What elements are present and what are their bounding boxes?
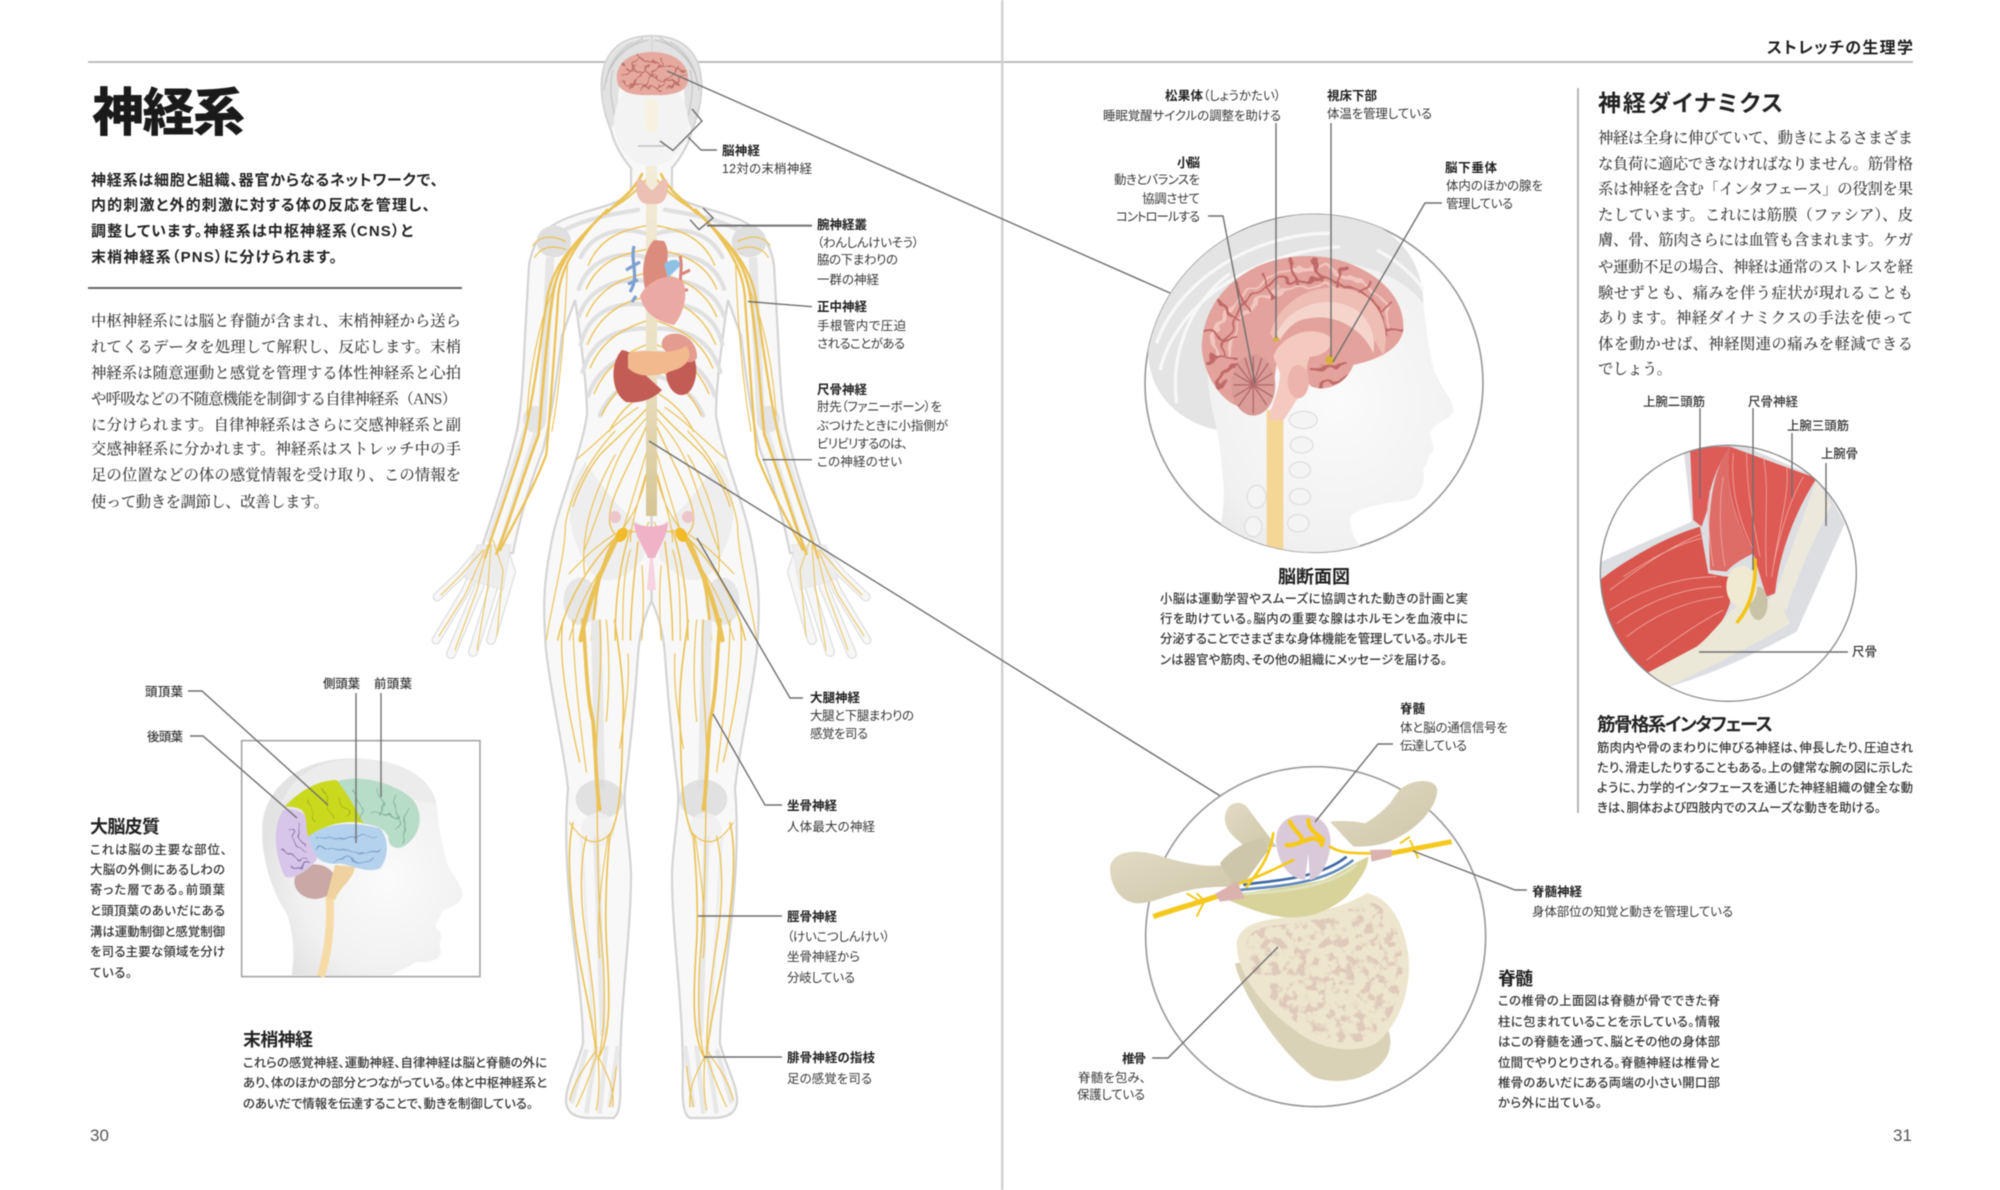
text: spinal cord: はこの脊髄を通って、脳とその他の身体部 — [1498, 1034, 1720, 1049]
text: cerebral cortex: を司る主要な領域を分け — [90, 944, 225, 959]
text: spinal cord: 椎骨のあいだにある両端の小さい開口部 — [1498, 1075, 1720, 1090]
cerebellum — [294, 864, 336, 899]
link line: spine to vertebra — [649, 441, 1230, 802]
label: hypothalamus: 体温を管理している — [1327, 106, 1432, 121]
label: pituitary: 体内のほかの腺を — [1446, 179, 1543, 193]
label: brachial plexus: 腕神経叢 — [817, 217, 867, 232]
spinal cord — [646, 166, 657, 516]
ulnar nerve — [1738, 560, 1755, 622]
text: neurodynamics — [1597, 90, 1914, 378]
text: spinal cord: から外に出ている。 — [1498, 1095, 1602, 1110]
label: brachial plexus: 一群の神経 — [817, 272, 879, 287]
label: pituitary: 脳下垂体 — [1445, 160, 1497, 175]
label: pineal body: 松果体 — [1165, 88, 1203, 103]
label: brachial plexus — [817, 217, 919, 287]
skeleton and nerves, leg — [675, 620, 741, 1113]
text: cerebral cortex: これは脳の主要な部位、 — [90, 842, 227, 857]
biceps — [1690, 447, 1730, 527]
text: spinal cord: 位間でやりとりされる。脊髄神経は椎骨と — [1498, 1055, 1720, 1070]
crevice — [1749, 587, 1768, 620]
label: peroneal digital nerve: 腓骨神経の指枝 — [787, 1050, 875, 1065]
body text: central nervous system: 足の位置などの体の感覚情報を受け取り、この情報を — [91, 465, 461, 484]
text: peripheral nerves: あり、体のほかの部分とつながっている。体と中枢神経系と — [243, 1075, 547, 1090]
label: ulnar nerve: 尺骨神経 — [817, 382, 867, 397]
text: spinal cord: この椎骨の上面図は脊髄が骨でできた脊 — [1498, 993, 1721, 1008]
label: spinal nerve: 身体部位の知覚と動きを管理している — [1532, 904, 1733, 919]
text: peripheral nerves — [243, 1030, 547, 1111]
ulna — [1647, 603, 1790, 688]
diagram: brain cross-section — [1145, 213, 1483, 553]
body text: central nervous system: れてくるデータを処理して解釈し、反応します。末梢 — [91, 337, 461, 356]
label: tibial nerve: （けいこつしんけい） — [787, 930, 890, 944]
label: hypothalamus: 視床下部 — [1327, 88, 1377, 103]
spinal cord — [321, 893, 330, 977]
forearm muscles — [1600, 527, 1730, 673]
text: cerebral cortex: 溝は運動制御と感覚制御 — [90, 924, 225, 939]
vertebral body rim — [1235, 957, 1390, 1081]
text: spinal cord — [1498, 968, 1721, 1110]
label: cerebellum — [1114, 156, 1200, 224]
meningeal layers — [1237, 857, 1357, 894]
body text: central nervous system — [91, 311, 461, 511]
label: femoral nerve — [810, 690, 914, 741]
text: musculoskeletal interface — [1597, 714, 1914, 815]
vertical rule: sidebar — [1577, 88, 1579, 813]
label: ulnar nerve: 肘先（ファニーボーン）を — [817, 399, 942, 414]
label: cranial nerves: 12対の末梢神経 — [722, 161, 812, 176]
text: peripheral nerves: これらの感覚神経、運動神経、自律神経は脳と脊髄の外に — [243, 1055, 547, 1070]
circle frame — [1146, 767, 1486, 1107]
label: sciatic nerve: 坐骨神経 — [787, 798, 837, 813]
label: ulnar nerve: ぶつけたときに小指側が — [817, 418, 949, 433]
nerve sheaths — [1215, 882, 1245, 902]
text: neurodynamics: でしょう。 — [1598, 360, 1672, 378]
text: brain section: 行を助けている。脳内の重要な腺はホルモンを血液中に — [1160, 611, 1468, 626]
canal ring — [1220, 857, 1368, 917]
text: neurodynamics: 神経ダイナミクス — [1598, 90, 1783, 116]
label: spinal cord: 伝達している — [1400, 739, 1467, 753]
text: neurodynamics: や運動不足の場合、神経は通常のストレスを経 — [1598, 258, 1914, 276]
separator rule — [88, 287, 462, 289]
vertebral body top — [1237, 893, 1409, 1049]
facet — [1220, 838, 1268, 885]
label: median nerve — [817, 299, 906, 351]
cervical vertebrae — [1245, 411, 1317, 537]
spongy bone speckles — [1247, 902, 1402, 1043]
organ: heart — [626, 240, 690, 325]
humerus — [1763, 480, 1832, 610]
label: cerebellum: 小脳 — [1177, 156, 1200, 170]
label: frontal lobe: 前頭葉 — [374, 676, 413, 691]
text: cerebral cortex — [89, 817, 227, 980]
skeleton and nerves, torso — [653, 174, 818, 640]
right transverse process — [1330, 781, 1437, 847]
body text: central nervous system: に分けられます。自律神経系はさらに交感神経系と副 — [91, 415, 461, 434]
half body (right side of image, mirrored below) — [652, 36, 867, 1118]
label: tibial nerve: 分岐している — [787, 971, 855, 985]
callout lines: lobes — [188, 691, 381, 843]
label: triceps: 上腕三頭筋 — [1787, 418, 1849, 433]
gyri — [283, 787, 410, 868]
label: peroneal digital nerve — [787, 1050, 875, 1086]
label: sciatic nerve: 人体最大の神経 — [787, 819, 875, 834]
label: median nerve: 正中神経 — [817, 299, 867, 314]
body text: central nervous system: や呼吸などの不随意機能を制御する自律神経系（ANS） — [91, 390, 457, 408]
label: ulnar nerve: ビリビリするのは、 — [817, 437, 908, 451]
running head: ストレッチの生理学 — [1767, 38, 1913, 57]
label: cranial nerves — [722, 143, 812, 176]
label: ulna: 尺骨 — [1852, 645, 1877, 659]
cerebellum — [1231, 354, 1275, 416]
text: brain section: 脳断面図 — [1278, 567, 1350, 587]
brain stem — [327, 865, 355, 900]
lead text: 調整しています。神経系は中枢神経系（CNS）と — [91, 222, 413, 240]
label: cerebellum: 動きとバランスを — [1114, 173, 1200, 187]
text: cerebral cortex: 大脳皮質 — [90, 817, 160, 837]
text: brain section: 小脳は運動学習やスムーズに協調された動きの計画と実 — [1160, 591, 1468, 606]
label: tibial nerve: 脛骨神経 — [787, 909, 837, 924]
label: hypothalamus — [1327, 88, 1432, 121]
organ: uterus and ovaries — [609, 511, 694, 590]
epicondyle — [1726, 566, 1757, 607]
text: spinal cord: 脊髄 — [1498, 968, 1533, 989]
label: vertebra: 保護している — [1077, 1087, 1145, 1102]
lead text: 内的刺激と外的刺激に対する体の反応を管理し、 — [91, 196, 430, 214]
text: neurodynamics: 験せずとも、痛みを伴う症状が現れることも — [1597, 283, 1913, 302]
label: spinal cord: 脊髄 — [1400, 701, 1425, 716]
label: parietal lobe: 頭頂葉 — [145, 685, 184, 699]
label: vertebra: 脊髄を包み、 — [1078, 1070, 1146, 1085]
label: pituitary — [1445, 160, 1543, 211]
spinal cord — [1276, 815, 1331, 880]
callout lines: vertebra — [1152, 744, 1527, 1058]
lead text: 神経系は細胞と組織、器官からなるネットワークで、 — [91, 171, 438, 189]
label: median nerve: 手根管内で圧迫 — [817, 318, 906, 333]
organ: brain in head — [617, 52, 688, 95]
brain — [1202, 256, 1403, 413]
text: musculoskeletal interface: きは、胴体および四肢内でのスムーズな動きを助ける。 — [1597, 800, 1881, 815]
organ: thyroid — [636, 179, 668, 204]
text: brain section: 分泌することでさまざまな身体機能を管理している。ホルモ — [1160, 631, 1468, 646]
triceps — [1728, 447, 1817, 597]
head hair strands — [652, 38, 700, 128]
text: neurodynamics: 体を動かせば、神経関連の痛みを軽減できる — [1598, 334, 1913, 353]
label: ulnar nerve: この神経のせい — [817, 454, 902, 469]
skin — [1590, 440, 1845, 688]
label: femoral nerve: 感覚を司る — [810, 726, 868, 741]
label: tibial nerve: 坐骨神経から — [787, 949, 860, 964]
label: peroneal digital nerve: 足の感覚を司る — [787, 1071, 872, 1086]
body text: central nervous system: 中枢神経系には脳と脊髄が含まれ、末梢神経から送ら — [91, 311, 461, 330]
mirrored half body — [436, 36, 652, 1118]
body text: central nervous system: 神経系は随意運動と感覚を管理する体性神経系と心拍 — [91, 363, 461, 382]
text: neurodynamics: な負荷に適応できなければなりません。筋骨格 — [1598, 154, 1913, 173]
text: cerebral cortex: 寄った層である。前頭葉 — [90, 882, 226, 897]
text: spinal cord: 柱に包まれていることを示している。情報 — [1498, 1014, 1721, 1029]
pituitary and pineal — [1273, 337, 1335, 365]
label: brachial plexus: （わんしんけいそう） — [817, 236, 919, 250]
label: sciatic nerve — [787, 798, 875, 834]
grey matter — [1240, 820, 1370, 887]
text: musculoskeletal interface: 筋骨格系インタフェース — [1597, 714, 1773, 735]
lead text — [91, 171, 438, 266]
label: ulnar nerve — [817, 382, 949, 469]
label: brachial plexus: 脇の下まわりの — [817, 253, 898, 267]
head silhouette — [1208, 266, 1453, 553]
label: vertebra — [1077, 1051, 1146, 1102]
spinal cord — [1267, 410, 1283, 553]
circle frame — [1145, 214, 1483, 552]
nerve roots — [1153, 894, 1223, 917]
label: pineal body: 睡眠覚醒サイクルの調整を助ける — [1103, 109, 1281, 123]
hair bands — [1157, 233, 1423, 403]
page number 31: 31 — [1893, 1126, 1912, 1145]
label: temporal lobe: 側頭葉 — [323, 677, 361, 691]
label: cerebellum: 協調させて — [1142, 191, 1200, 206]
label: pituitary: 管理している — [1446, 196, 1513, 211]
muscle fibres — [1610, 453, 1803, 660]
label: cerebellum: コントロールする — [1116, 210, 1200, 224]
text: brain section — [1160, 567, 1468, 667]
text: musculoskeletal interface: 筋肉内や骨のまわりに伸びる神経は、伸長したり、圧迫され — [1597, 740, 1914, 755]
left transverse process — [1110, 852, 1240, 903]
lead text: 末梢神経系（PNS）に分けられます。 — [91, 248, 337, 266]
label: spinal nerve: 脊髄神経 — [1532, 884, 1582, 899]
text: cerebral cortex: 大脳の外側にあるしわの — [90, 862, 225, 877]
hair mass — [1187, 233, 1423, 430]
label: biceps: 上腕二頭筋 — [1643, 394, 1705, 409]
text: cerebral cortex: と頭頂葉のあいだにある — [90, 904, 225, 918]
label: pineal body: （しょうかたい） — [1203, 89, 1281, 103]
text: neurodynamics: たしています。これには筋膜（ファシア）、皮 — [1598, 206, 1913, 224]
text: peripheral nerves: 末梢神経 — [243, 1030, 313, 1050]
text: brain section: ンは器官や筋肉、その他の組織にメッセージを届ける。 — [1160, 652, 1447, 667]
text: neurodynamics: 神経は全身に伸びていて、動きによるさまざま — [1598, 129, 1913, 147]
diagram: cerebral cortex lobes — [242, 741, 480, 977]
label: median nerve: されることがある — [817, 336, 905, 351]
corpus callosum — [1270, 288, 1386, 357]
callout lines: body labels — [660, 109, 812, 1057]
text: peripheral nerves: のあいだで情報を伝達することで、動きを制御している。 — [243, 1096, 533, 1111]
parietal lobe — [285, 780, 363, 837]
frontal lobe — [337, 779, 420, 848]
superior process — [1225, 803, 1277, 850]
diagram: elbow — [1590, 440, 1856, 701]
label: humerus: 上腕骨 — [1821, 447, 1858, 461]
occipital lobe — [276, 809, 317, 877]
label: spinal cord — [1400, 701, 1508, 753]
label: ulnar nerve: 尺骨神経 — [1748, 394, 1799, 409]
diagram: vertebra — [1110, 767, 1486, 1107]
temporal lobe — [308, 824, 387, 870]
brain stem — [1268, 331, 1331, 420]
face details — [614, 78, 688, 166]
callout lines: brain — [1208, 123, 1442, 383]
label: spinal cord: 体と脳の通信信号を — [1400, 720, 1508, 735]
organ: digestive system — [613, 334, 697, 402]
label: cranial nerves: 脳神経 — [722, 143, 760, 158]
frame — [242, 741, 480, 977]
callout lines: elbow — [1699, 408, 1848, 652]
label: tibial nerve — [787, 909, 890, 985]
label: spinal nerve — [1532, 884, 1733, 919]
label: femoral nerve: 大腿と下腿まわりの — [810, 708, 914, 723]
label: vertebra: 椎骨 — [1122, 1051, 1146, 1066]
label: pineal body — [1103, 88, 1281, 123]
label: occipital lobe: 後頭葉 — [147, 729, 184, 744]
text: neurodynamics: 膚、骨、筋肉さらには血管も含まれます。ケガ — [1598, 230, 1913, 249]
text: cerebral cortex: ている。 — [89, 966, 132, 980]
text: musculoskeletal interface: ように、力学的インタフェースを通じた神経組織の健全な動 — [1597, 780, 1913, 795]
brain gyri — [1205, 258, 1402, 387]
page number 30: 30 — [90, 1126, 109, 1145]
body text: central nervous system: 使って動きを調節し、改善します。 — [91, 493, 329, 511]
head profile — [262, 758, 462, 976]
text: neurodynamics: 系は神経を含む「インタフェース」の役割を果 — [1598, 179, 1913, 198]
title: 神経系 — [92, 85, 245, 143]
text: neurodynamics: あります。神経ダイナミクスの手法を使って — [1598, 309, 1913, 327]
label: femoral nerve: 大腿神経 — [810, 690, 860, 705]
text: musculoskeletal interface: たり、滑走したりすることもある。上の健常な腕の図に示した — [1597, 760, 1913, 775]
link line: brain to cross-section — [667, 71, 1170, 293]
body text: central nervous system: 交感神経系に分かれます。神経系はストレッチ中の手 — [91, 439, 461, 458]
